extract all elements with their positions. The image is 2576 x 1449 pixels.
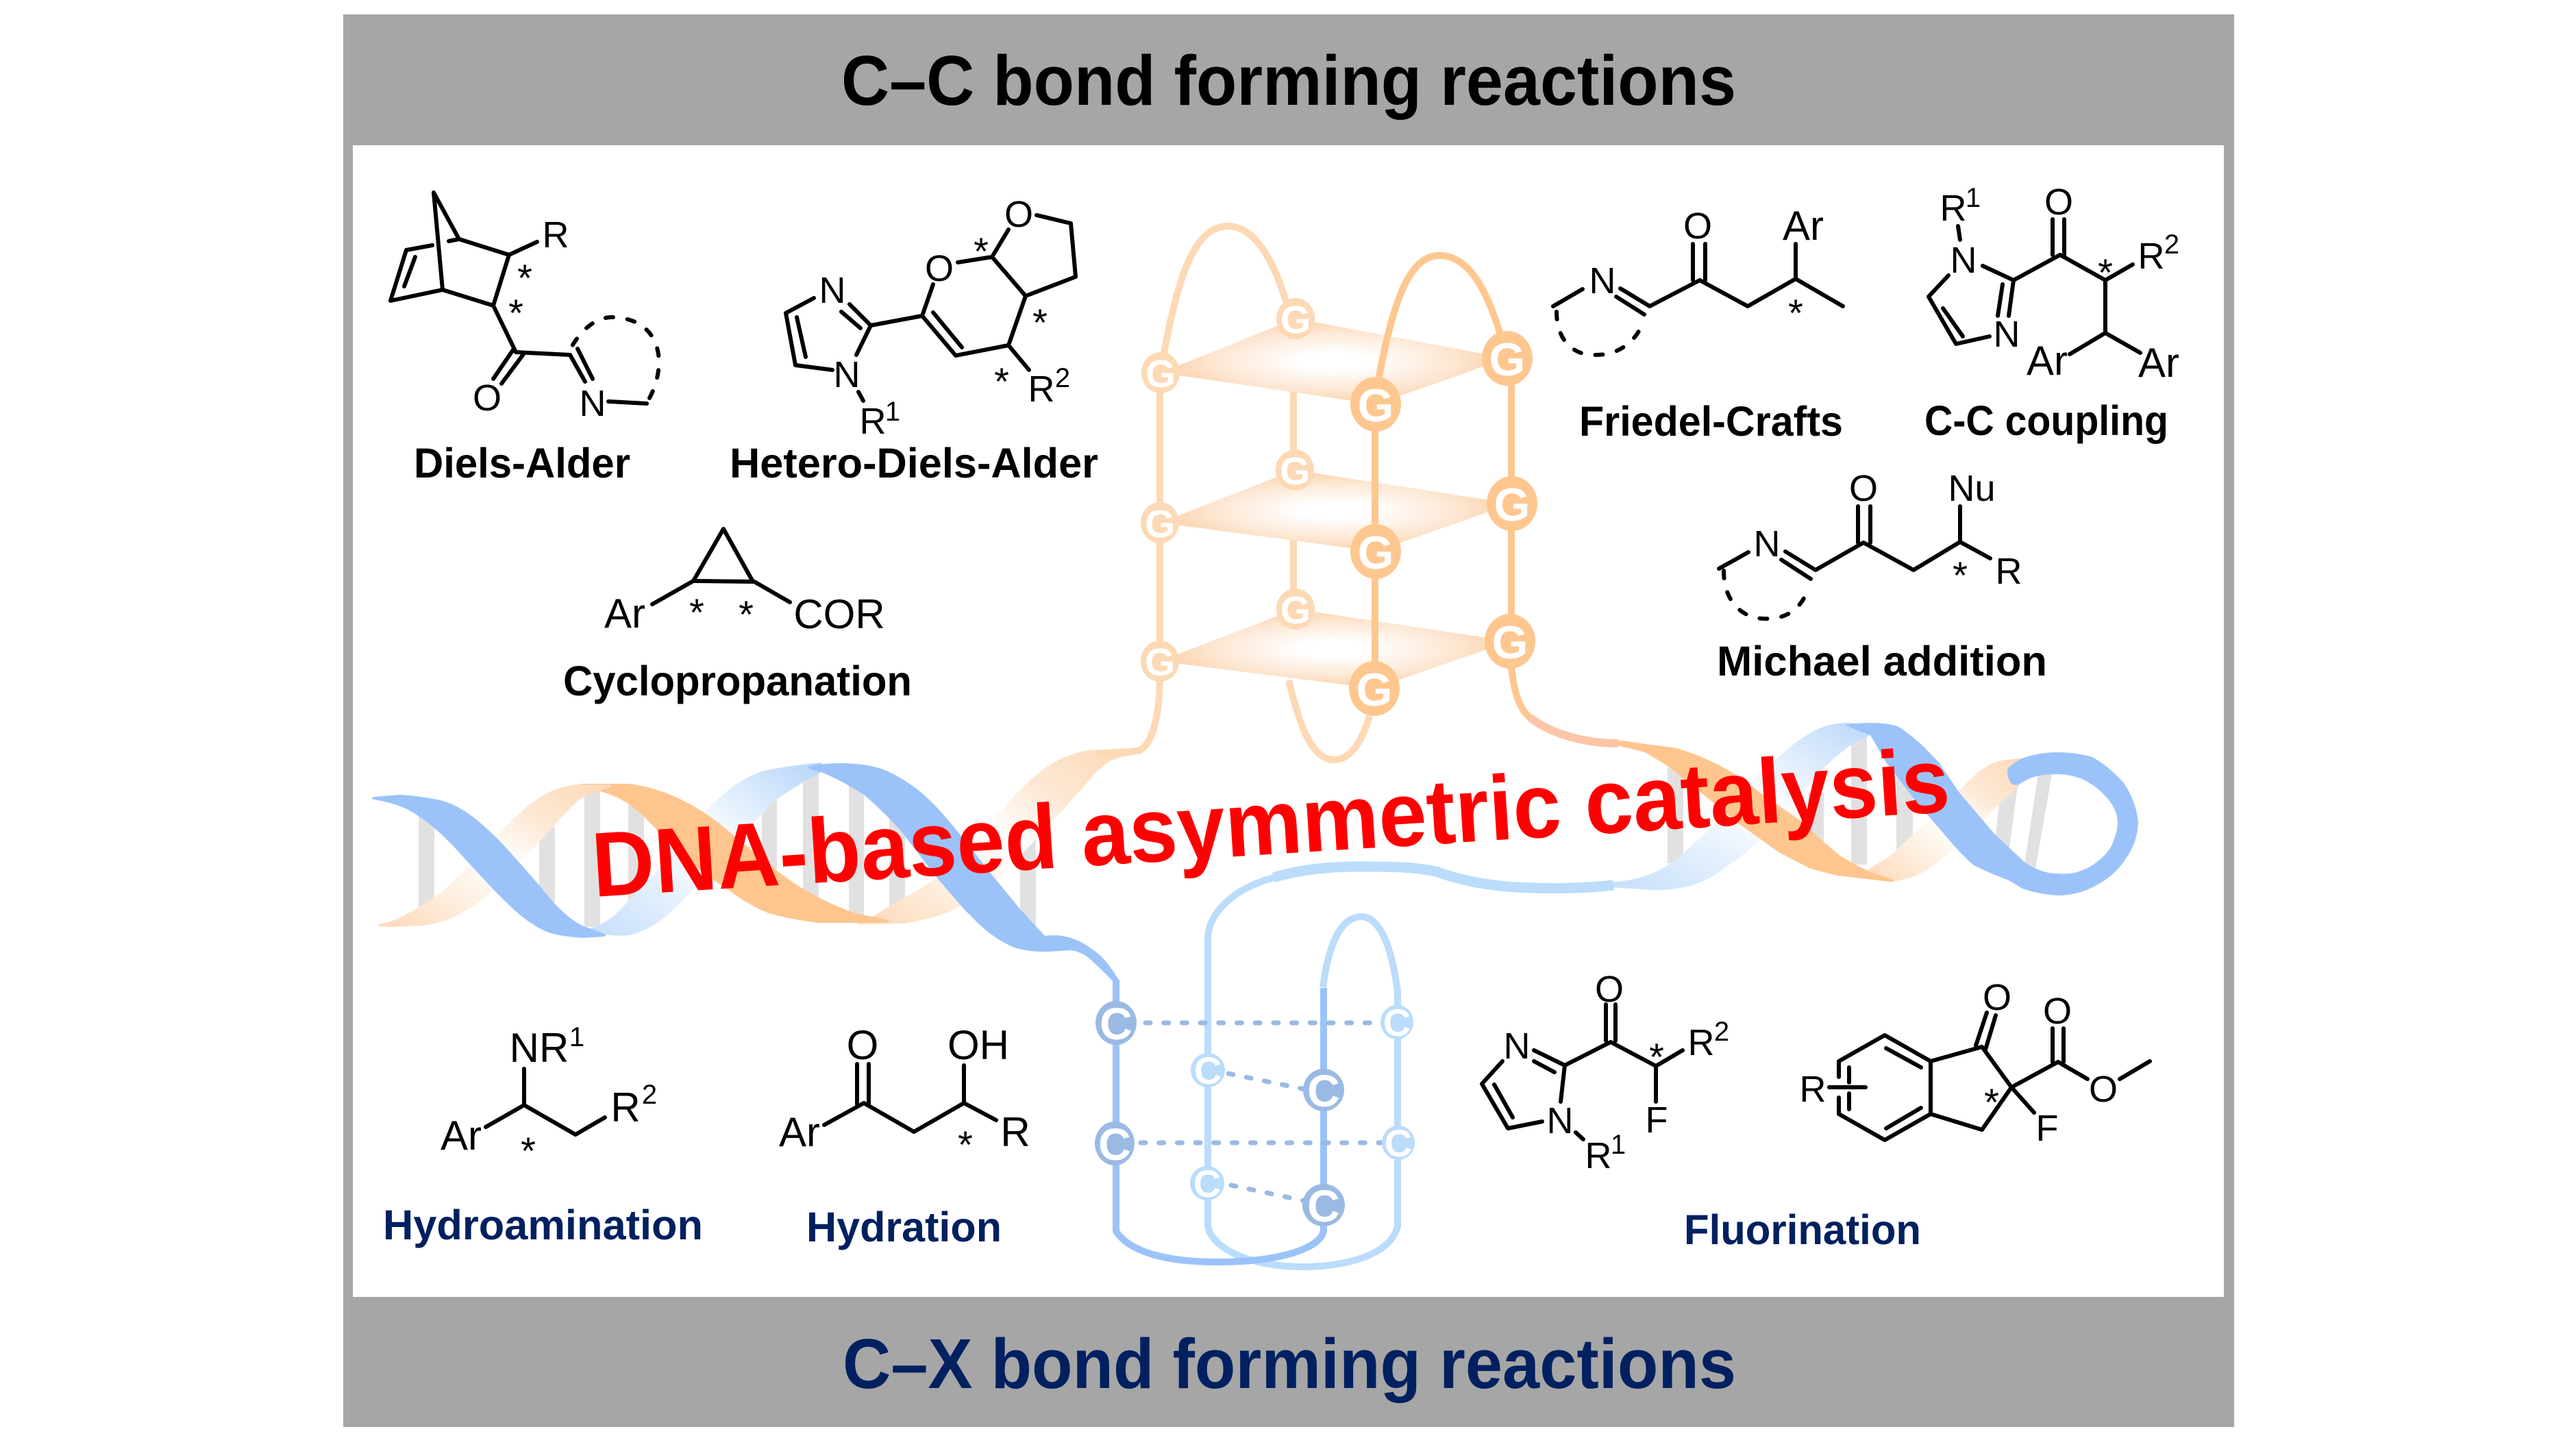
guanine nodes, light: G [1280,589,1311,632]
guanine nodes, light: G [1280,449,1310,493]
tetrad plane 1 [1161,319,1507,404]
molecule: Hetero-Diels-Alder product: O [1004,194,1033,235]
cytosine nodes, light: C [1383,1001,1411,1044]
back strands and loops [1096,226,1370,760]
molecule: Michael addition product: Nu [1948,468,1996,509]
molecule: Diels-Alder product: O [473,377,501,419]
molecule: Hetero-Diels-Alder product: 2 [1055,363,1070,393]
molecule: hydration product: O [847,1022,878,1068]
label: C-C coupling: C-C coupling [1924,397,2168,444]
guanine nodes, front [1349,331,1537,716]
molecule: C-C coupling product: Ar [2138,340,2179,386]
molecule: fluorinated indanone: O [2089,1069,2118,1110]
molecule: Friedel-Crafts product: Ar [1783,203,1824,249]
molecule: Hetero-Diels-Alder product: * [974,230,989,273]
molecule: Hetero-Diels-Alder product: N [833,354,860,395]
molecule: hydroamination product: NR [510,1025,569,1071]
guanine nodes, front: G [1494,479,1530,531]
molecule: C-C coupling product: * [2098,251,2113,294]
molecule: Michael addition product: * [1953,554,1968,597]
guanine nodes, front: G [1358,380,1394,432]
molecule: Friedel-Crafts product: * [1788,291,1803,334]
guanine nodes, light: G [1145,352,1176,396]
cytosine nodes, dark: C [1307,1065,1340,1116]
guanine nodes, front: G [1357,664,1392,716]
light blue strand right [1610,723,1892,890]
label: Cyclopropanation: Cyclopropanation [563,658,912,704]
molecule: Hetero-Diels-Alder product: 1 [885,397,900,427]
panel: white content area [353,145,2224,1297]
molecule: cyclopropane product: COR [793,591,885,637]
light orange strand left [378,784,611,927]
light blue strand left [591,763,821,936]
diagram: i-motif [1095,867,1613,1267]
molecule: Diels-Alder product: N [580,383,606,424]
cytosine nodes, dark: C [1098,1119,1131,1169]
blue strand left [372,795,606,938]
light orange strand middle [856,748,1134,924]
guanine nodes, light: G [1145,502,1175,546]
blue strand right with loop [1846,723,2138,895]
diagram: DNA double helix [372,723,2138,981]
molecule: fluorinated imidazole ketone: R [1585,1135,1611,1176]
molecule: fluorinated indanone: * [1984,1080,1999,1124]
heading: C-X bond forming reactions: C–X bond forming reactions [843,1324,1736,1403]
molecule: cyclopropane product: * [689,591,704,634]
light blue strand [1208,878,1398,1267]
guanine nodes, light: G [1280,298,1311,342]
molecule: fluorinated imidazole ketone: 1 [1611,1130,1626,1160]
cytosine nodes, light: C [1194,1049,1222,1092]
label: Diels-Alder: Diels-Alder [414,440,630,486]
molecule: fluorinated imidazole ketone: O [1595,969,1624,1010]
tetrad plane 2 [1160,470,1512,552]
molecule: fluorinated indanone: O [2043,991,2072,1032]
pink tail segment [1531,718,1618,743]
label: Hydroamination: Hydroamination [383,1202,703,1248]
molecule: Hetero-Diels-Alder product: R [1028,369,1055,410]
label: Hydration: Hydration [806,1204,1002,1250]
molecule: Michael addition product: O [1849,468,1878,509]
orange strand right [1617,740,1894,882]
dashed base pairs [1141,1023,1383,1201]
label: Hetero-Diels-Alder: Hetero-Diels-Alder [730,440,1098,486]
molecule: hydration product: Ar [779,1109,820,1155]
light blue linker [1274,867,1613,888]
molecule: fluorinated indanone [1799,977,2150,1149]
cytosine nodes, dark: C [1100,998,1132,1049]
molecule: fluorinated imidazole ketone: * [1649,1035,1664,1078]
label: Fluorination: Fluorination [1684,1206,1921,1253]
molecule: fluorinated indanone: F [2036,1108,2058,1149]
molecule: Hetero-Diels-Alder product: R [859,401,887,442]
cytosine nodes, light: C [1193,1162,1221,1205]
molecule: C-C coupling product [1929,182,2179,386]
molecule: cyclopropane product: * [739,593,754,636]
molecule: fluorinated imidazole ketone: N [1503,1026,1531,1067]
molecule: C-C coupling product: 2 [2164,230,2179,260]
molecule: hydroamination product [441,1022,657,1172]
front strands and loop [1375,256,1531,718]
molecule: Friedel-Crafts product: N [1589,260,1615,301]
molecule: hydration product [779,1022,1030,1166]
molecule: hydroamination product: 1 [569,1022,584,1052]
guanine nodes, light [1141,298,1315,684]
rungs of the helix [419,735,2052,930]
molecule: Hetero-Diels-Alder product: N [819,270,845,311]
molecule: Michael addition product [1719,468,2022,619]
molecule: Friedel-Crafts product [1553,203,1843,355]
molecule: fluorinated imidazole ketone: 2 [1714,1017,1729,1047]
title: DNA-based asymmetric catalysis: DNA-based asymmetric catalysis [589,730,1953,917]
cytosine nodes, light: C [1385,1122,1412,1165]
molecule: hydroamination product: * [521,1129,536,1172]
molecule: fluorinated imidazole ketone: N [1547,1100,1573,1141]
molecule: hydroamination product: 2 [642,1080,657,1110]
molecule: Friedel-Crafts product: O [1683,206,1712,247]
molecule: Hetero-Diels-Alder product: * [1032,301,1048,344]
orange strand left [581,784,889,923]
guanine nodes, front: G [1358,527,1394,579]
molecule: hydroamination product: R [610,1085,641,1130]
molecule: Diels-Alder product [391,193,659,424]
tetrad plane 3 [1160,609,1510,689]
cytosine nodes, light [1190,1001,1415,1205]
molecule: C-C coupling product: N [1950,240,1977,281]
molecule: Hetero-Diels-Alder product: O [925,248,954,289]
molecule: Diels-Alder product: * [517,256,532,299]
diagram: G-quadruplex [1096,226,1618,760]
blue strand middle [808,763,1119,981]
molecule: hydroamination product: Ar [441,1113,482,1159]
molecule: fluorinated indanone: R [1799,1069,1826,1110]
molecule: hydration product: R [1000,1109,1030,1155]
molecule: C-C coupling product: O [2044,182,2073,223]
molecule: C-C coupling product: Ar [2027,338,2068,384]
heading: C-C bond forming reactions: C–C bond forming reactions [841,41,1736,120]
blue strand [1116,980,1324,1262]
molecule: fluorinated indanone: O [1983,977,2011,1018]
molecule: C-C coupling product: 1 [1966,183,1981,213]
molecule: Hetero-Diels-Alder product: * [994,360,1009,403]
molecule: fluorinated imidazole ketone [1482,969,1729,1176]
label: Friedel-Crafts: Friedel-Crafts [1579,398,1843,445]
molecule: fluorinated imidazole ketone: F [1646,1100,1668,1141]
light blue hairpin top [1323,917,1398,1022]
panel: gray frame [343,14,2234,1427]
molecule: Michael addition product: R [1995,551,2022,592]
molecule: fluorinated imidazole ketone: R [1688,1022,1714,1063]
cytosine nodes, dark: C [1307,1180,1340,1231]
molecule: hydration product: * [958,1123,973,1166]
molecule: Hetero-Diels-Alder product [786,194,1076,442]
guanine nodes, front: G [1489,334,1525,386]
molecule: C-C coupling product: N [1994,314,2020,355]
molecule: C-C coupling product: R [2138,236,2165,277]
guanine nodes, front: G [1492,617,1528,669]
label: Michael addition: Michael addition [1717,638,2047,684]
molecule: cyclopropane product: Ar [604,591,645,636]
molecule: Michael addition product: N [1754,523,1780,565]
molecule: cyclopropane product [604,529,885,637]
molecule: Diels-Alder product: R [543,214,569,256]
molecule: hydration product: OH [948,1022,1009,1068]
light orange strand right [1867,758,2026,881]
cytosine nodes, dark [1095,998,1345,1231]
guanine nodes, light: G [1145,641,1175,684]
molecule: C-C coupling product: R [1940,188,1966,229]
molecule: Diels-Alder product: * [508,291,523,334]
